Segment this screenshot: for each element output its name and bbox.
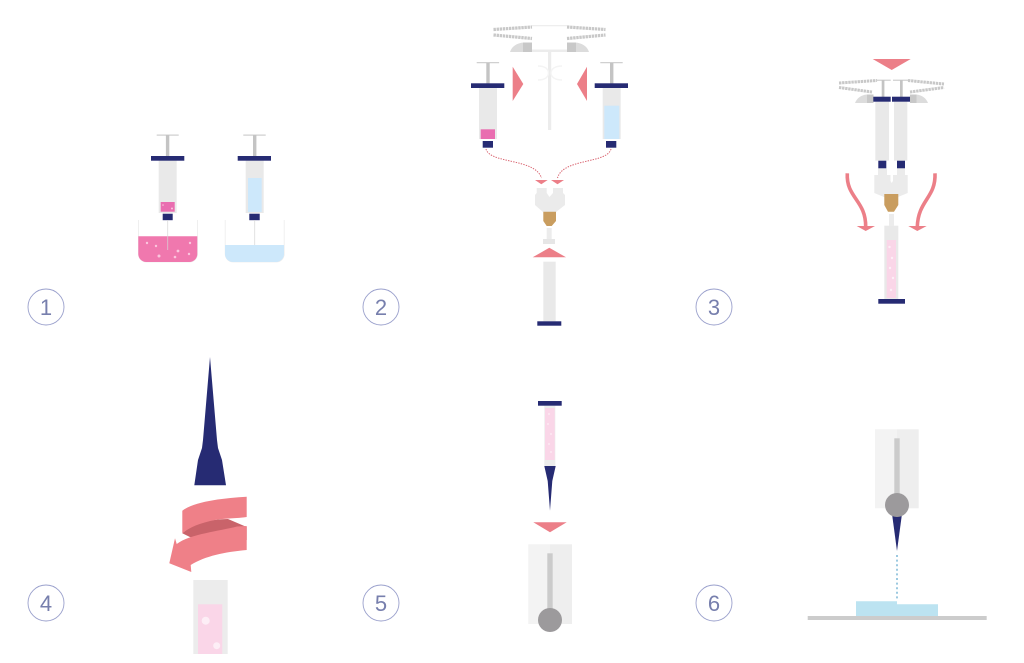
dispenser holder — [875, 429, 919, 508]
panel: step 2 — [363, 26, 628, 326]
press mechanism — [839, 80, 944, 103]
panel: step 3 — [696, 59, 944, 325]
arrow: curved right — [908, 173, 935, 231]
filled syringe — [878, 226, 905, 304]
step number 5 — [363, 585, 399, 621]
dispensing tip — [892, 516, 902, 551]
twin syringes — [873, 80, 910, 168]
dispensing tip — [194, 357, 226, 485]
base plate — [808, 616, 987, 620]
arrow: curved left — [847, 173, 875, 231]
step number 2 — [363, 289, 399, 325]
Y connector — [874, 168, 908, 226]
step number 6 — [696, 585, 732, 621]
panel: step 4 — [28, 357, 247, 654]
panel: step 1 — [28, 135, 284, 325]
step number 5: 5 — [375, 591, 387, 616]
syringe with tip — [538, 401, 562, 511]
blue syringe — [595, 62, 628, 148]
press mechanism — [494, 26, 606, 130]
step number 6: 6 — [708, 591, 720, 616]
pink syringe — [471, 62, 504, 148]
arrow: push up — [533, 248, 566, 257]
pink beaker — [138, 220, 198, 262]
blue syringe — [238, 135, 271, 245]
dispenser holder — [528, 544, 572, 632]
step number 3 — [696, 289, 732, 325]
arrow: insert down — [533, 522, 567, 532]
empty syringe — [537, 262, 561, 326]
piston ball — [885, 493, 909, 517]
step number 4: 4 — [40, 591, 52, 616]
arrow: twist ribbon — [169, 497, 247, 572]
panel: step 5 — [363, 401, 572, 632]
step number 3: 3 — [708, 295, 720, 320]
blue beaker — [225, 220, 284, 262]
arrow: press down — [873, 59, 911, 70]
printed layer — [856, 601, 938, 616]
pink syringe — [151, 135, 184, 250]
droplet stream — [896, 555, 898, 599]
step number 4 — [28, 585, 64, 621]
step number 2: 2 — [375, 295, 387, 320]
arrow: press left — [513, 67, 523, 101]
syringe body — [193, 580, 228, 654]
arrow: dotted flow right — [551, 149, 611, 184]
panel: step 6 — [696, 429, 987, 621]
arrow: dotted flow left — [486, 149, 548, 184]
arrow: press right — [577, 67, 587, 101]
step number 1: 1 — [40, 295, 52, 320]
Y connector — [535, 188, 565, 244]
step number 1 — [28, 289, 64, 325]
